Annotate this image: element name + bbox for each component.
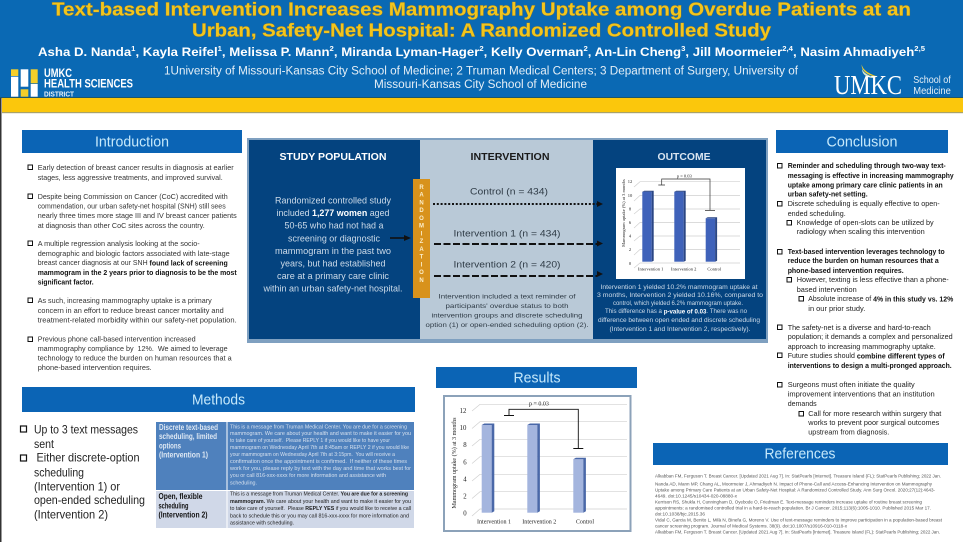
conclusion bullets: Discrete scheduling is equally effective to open- <box>788 199 940 208</box>
affiliations: Missouri-Kansas City School of Medicine <box>374 79 587 91</box>
randomization bar: T <box>420 255 424 261</box>
outcome bar chart: Intervention 2 <box>671 266 696 272</box>
conclusion bullets: in our prior study. <box>808 304 865 313</box>
introduction text: concern in an effort to reduce breast cancer mortality and <box>38 306 224 315</box>
intervention 2 message: mammogram. We care about your health and want to make it easier for you <box>230 499 411 505</box>
results heading: Results <box>514 370 560 386</box>
intervention 1 message: you or call 816-xxx-xxxx for more information and assistance with <box>230 473 386 479</box>
introduction text: mammogram in the 2 years prior to diagnosis to be the most <box>38 268 237 277</box>
conclusion bullets: However, texting is less effective than a phone- <box>797 275 949 284</box>
conclusion bullets: radiology when scaling this intervention <box>797 227 925 236</box>
introduction text: As such, increasing mammography uptake is a primary <box>38 296 212 305</box>
intervention 2 label: Open, flexible <box>158 492 203 501</box>
intervention 1 message: mammogram on Wednesday April 7th at 8:45am or REPLY 2 if you would like <box>230 445 409 451</box>
conclusion bullets: Knowledge of open-slots can be utilized by <box>797 218 934 227</box>
authors: 2,4 <box>782 46 793 52</box>
intervention 1 message: mammogram. We care about your health and want to make it easier for you <box>230 431 411 437</box>
outcome bar chart: Intervention 1 <box>638 266 663 272</box>
introduction text: nearly three times more stage III and IV breast cancer patients <box>38 211 237 220</box>
conclusion bullets: improvement interventions that an institution <box>788 390 935 398</box>
panel: study population <box>249 140 420 339</box>
panel: intervention: Intervention 1 (n = 434) <box>454 228 560 240</box>
methods heading: Methods <box>192 392 245 408</box>
introduction text: treatment-related morbidity within our safety-net population. <box>38 316 237 324</box>
outcome text <box>597 284 763 333</box>
logo: UMKC Health Sciences District: DISTRICT <box>44 90 74 98</box>
results bar chart: 10 <box>460 425 467 432</box>
results bar chart: Intervention 2 <box>522 520 556 526</box>
authors: 3 <box>681 46 686 52</box>
intervention 1 label: options <box>159 442 181 450</box>
conclusion bullets: urban safety-net setting. <box>788 190 868 198</box>
panel: study population: included 1,277 women aged <box>276 208 390 218</box>
methods heading <box>22 387 415 412</box>
references text: doi:10.1038/bjc.2015.36 <box>655 512 705 516</box>
introduction text: Despite being Commission on Cancer (CoC) accredited with <box>38 192 228 201</box>
intervention 1 message: scheduling. <box>230 480 257 486</box>
authors: , Miranda Lyman-Hager <box>334 45 480 59</box>
panel: study population: within an urban safety-net hospital. <box>262 284 402 294</box>
panel: outcome: OUTCOME <box>658 151 710 163</box>
outcome bar chart: 6 <box>629 220 632 225</box>
introduction text: Early detection of breast cancer results in diagnosis at earlier <box>38 163 234 172</box>
references text: appointments: a randomised controlled trial in a hard-to-reach population. Br J Cancer. 2015;113(6):1005-1010. Published 2015 Mar 17. <box>655 506 931 510</box>
panel: intervention: participants' overdue status to both <box>446 303 569 310</box>
outcome text: Intervention 1 yielded 10.2% mammogram uptake at <box>600 284 758 291</box>
authors: , Jill Moormeier <box>685 45 783 59</box>
panel: study population: screening or diagnostic <box>288 233 381 243</box>
outcome bar chart: 4 <box>629 234 632 238</box>
outcome text: This difference has a p-value of 0.03. There was no <box>605 308 747 315</box>
references text: cancer screening program. Journal of Medical Systems. 38(9). doi:10.1007/s10916-010-0118-x <box>655 524 848 528</box>
introduction text: phone-based intervention requires. <box>38 363 152 372</box>
outcome bar chart: Control <box>707 266 722 272</box>
results bar chart: 4 <box>463 476 467 484</box>
results bar chart: 8 <box>463 442 467 449</box>
conclusion heading: Conclusion <box>826 134 898 150</box>
conclusion bullets: interventions to design a multi-pronged approach. <box>788 361 952 370</box>
panel: intervention: intervention groups and discrete scheduling <box>432 312 583 320</box>
references text: Uptake among Primary Care Patients at an Urban Safety-Net Hospital: A Randomized Controlled Study. Ann Surg Oncol. 2020;27(12):4643- <box>655 488 935 492</box>
methods table <box>156 422 414 528</box>
introduction heading <box>22 130 242 153</box>
conclusion bullets: uptake among primary care clinic patients in an <box>788 180 943 190</box>
outcome text: difference between open ended and discrete scheduling <box>598 317 760 324</box>
randomization bar: O <box>419 216 424 222</box>
intervention 1 label: (Intervention 1) <box>159 450 208 460</box>
outcome text: 3 months, Intervention 2 yielded 10.16%, compared to <box>597 292 763 299</box>
references text: 4649. doi:10.1245/s10434-020-08880-x <box>655 494 738 498</box>
randomization bar: Z <box>420 239 424 245</box>
methods bullets: (Intervention 1) or <box>34 480 120 494</box>
results bar chart <box>444 396 630 531</box>
outcome bar chart: Mammogram uptake (%) at 3 months <box>621 179 626 247</box>
conclusion bullets: Future studies should combine different types of <box>788 351 945 360</box>
panel: methods <box>20 387 415 528</box>
authors: , Kayla Reifel <box>135 45 218 59</box>
conclusion bullets: Text-based intervention leverages technology to <box>788 247 945 256</box>
intervention 1 label <box>159 423 218 460</box>
introduction text: significant factor. <box>38 278 94 286</box>
conclusion bullets: Absolute increase of 4% in this study vs. 12% <box>808 294 954 303</box>
methods bullets: scheduling <box>34 465 84 479</box>
introduction heading: Introduction <box>95 134 169 150</box>
methods bullets: sent <box>34 437 55 451</box>
intervention 1 message: your mammogram on Wednesday April 7th at 3:15pm. You will receive a <box>230 452 395 458</box>
outcome bar chart: 10 <box>628 193 633 198</box>
results bar chart: 2 <box>463 494 467 500</box>
conclusion bullets: phone-based intervention requires. <box>788 266 904 275</box>
randomization bar <box>413 179 430 298</box>
randomization bar: A <box>419 247 424 253</box>
affiliations: 1University of Missouri-Kansas City School of Medicine; 2 Truman Medical Centers; 3 Department of Surgery, University of <box>164 66 799 78</box>
arrow: population to randomization <box>390 235 411 241</box>
references text: Kerrison RS, Shukla H, Cunningham D, Oyebode O, Friedman E. Text-message reminders increase uptake of routine breast screening <box>655 500 922 504</box>
randomization bar: D <box>419 208 424 214</box>
results bar chart: Control <box>576 520 594 526</box>
panel: study population: Randomized controlled study <box>275 195 392 205</box>
introduction text <box>28 163 237 372</box>
intervention 2 message: to take care of yourself. Please REPLY YES if you would like to receive a call <box>230 506 411 512</box>
results bar chart: 12 <box>460 408 467 415</box>
references heading <box>653 443 948 465</box>
logo: UMKC Health Sciences District: UMKC <box>44 68 72 80</box>
arrow: intervention 2 <box>434 271 603 277</box>
intervention 1 label: scheduling, limited <box>159 432 217 441</box>
panel: intervention <box>420 140 593 339</box>
references heading: References <box>764 446 836 462</box>
conclusion bullets <box>778 161 954 436</box>
conclusion heading <box>776 130 948 153</box>
affiliations <box>164 66 799 91</box>
results bar chart: 6 <box>463 460 467 466</box>
conclusion bullets: reduce the burden on human resources that a <box>788 256 939 265</box>
authors: , An-Lin Cheng <box>588 45 681 59</box>
intervention 1 label: Discrete text-based <box>159 423 218 432</box>
panel: study population: STUDY POPULATION <box>280 151 386 163</box>
intervention 2 message: This is a message from Truman Medical Center. You are due for a screening <box>230 492 408 498</box>
references text: Nanda AD, Mann MP, Chang AL, Moormeier J, Ahmadiyeh N. Impact of Phone-Call and Access-Enhancing Intervention on Mammography <box>655 482 933 486</box>
conclusion bullets: Surgeons must often initiate the quality <box>788 380 915 389</box>
introduction text: commendation, our urban safety-net hospital (SNH) still sees <box>38 202 226 210</box>
panel: intervention: Intervention 2 (n = 420) <box>454 260 560 270</box>
panel: conclusion <box>776 130 954 436</box>
methods bullets: (Intervention 2) <box>34 507 108 521</box>
methods bullets: open-ended scheduling <box>34 493 145 507</box>
authors: , Melissa P. Mann <box>222 45 330 59</box>
panel: intervention: option (1) or open-ended scheduling option (2). <box>426 322 589 329</box>
panel: study population: mammogram in the past two <box>275 246 391 256</box>
references text: Alkabban FM, Ferguson T. Breast Cancer. [Updated 2021 Aug 7]. In: StatPearls [Internet]. Treasure Island (FL): StatPearls Publishing; 2022 Jan. <box>655 530 940 534</box>
conclusion bullets: population; it demands a complex and personalized <box>788 332 953 341</box>
authors: 2,5 <box>914 46 925 52</box>
authors: , Nasim Ahmadiyeh <box>793 45 914 59</box>
outcome bar chart: 0 <box>629 261 632 266</box>
introduction text: stages, less aggressive treatments, and improved survival. <box>38 173 223 182</box>
intervention 1 message: confirmation once the appointment is confirmed. If neither of these times <box>230 459 407 465</box>
randomization bar: R <box>419 185 424 191</box>
intervention 1 message: to take care of yourself. Please REPLY 1 if you would like to have your <box>230 438 390 444</box>
randomization bar: N <box>419 278 424 284</box>
panel: intervention: INTERVENTION <box>470 151 550 163</box>
panel: intervention: Intervention included a text reminder of <box>438 294 576 300</box>
intervention 2 message <box>230 492 411 526</box>
randomization bar: I <box>421 262 423 268</box>
intervention 1 message: This is a message from Truman Medical Center. You are due for a screening <box>230 424 407 430</box>
intervention 2 label <box>158 492 208 520</box>
results bar chart: p = 0.03 <box>529 401 549 407</box>
intervention 2 message: back to schedule this or you may call 816-xxx-xxxx for more information and <box>230 513 409 519</box>
conclusion bullets: Reminder and scheduling through two-way text- <box>788 161 946 170</box>
arrow: intervention 1 <box>434 240 603 246</box>
intervention 2 message: assistance with scheduling. <box>230 520 294 526</box>
outcome bar chart: 8 <box>629 206 632 212</box>
authors: Asha D. Nanda <box>38 45 123 59</box>
randomization bar: O <box>419 270 424 276</box>
outcome bar chart: 12 <box>628 179 632 184</box>
authors: 2 <box>479 46 484 52</box>
authors: 2 <box>583 46 588 52</box>
conclusion bullets: approach to increasing mammography uptake. <box>788 342 936 351</box>
panel: introduction <box>22 130 242 372</box>
logo: UMKC School of Medicine: Medicine <box>913 85 951 97</box>
logo: UMKC School of Medicine <box>834 64 951 100</box>
header banner <box>0 0 963 113</box>
logo: UMKC Health Sciences District: HEALTH SCIENCES <box>44 78 133 90</box>
title <box>52 0 911 40</box>
intervention 1 message: work for you, please reply by text with the day and time that works best for <box>229 466 411 472</box>
methods bullets <box>20 422 145 521</box>
randomization bar: A <box>419 193 424 199</box>
title: Urban, Safety-Net Hospital: A Randomized Controlled Study <box>192 20 772 40</box>
introduction text: Previous phone call-based intervention increased <box>38 334 196 344</box>
authors: , Kelly Overman <box>484 45 583 59</box>
results bar chart: Mammogram uptake (%) at 3 months <box>451 417 458 508</box>
randomization bar: N <box>419 200 424 206</box>
intervention 2 label: scheduling <box>158 502 189 510</box>
randomization bar: M <box>419 224 424 230</box>
authors: 1 <box>131 46 136 52</box>
conclusion bullets: based intervention <box>797 285 857 294</box>
logo: UMKC School of Medicine: UMKC <box>834 70 902 100</box>
randomization bar: I <box>421 231 423 237</box>
logo: UMKC Health Sciences District <box>11 68 133 98</box>
panel: study population: care at a primary care clinic <box>277 271 390 281</box>
outcome text: control, which yielded 6.2% mammogram uptake. <box>613 300 743 307</box>
panel: outcome <box>593 140 766 339</box>
introduction text: A multiple regression analysis looking at the socio- <box>38 239 200 248</box>
methods bullets: Up to 3 text messages <box>34 422 138 436</box>
panel: study design frame <box>247 138 768 343</box>
panel: references <box>653 443 948 534</box>
conclusion bullets: ended scheduling. <box>788 209 846 218</box>
introduction text: technology to reduce the burden on human resources that a <box>38 354 232 362</box>
intervention 1 message <box>229 424 411 486</box>
panel: results <box>436 367 637 531</box>
introduction text: breast cancer diagnosis at our SNH found lack of screening <box>38 258 228 267</box>
outcome bar chart: 2 <box>629 247 631 252</box>
outcome bar chart <box>616 168 745 279</box>
panel: study population: years, but had established <box>280 258 386 268</box>
panel: intervention: Control (n = 434) <box>470 186 548 198</box>
logo: UMKC School of Medicine: School of <box>913 74 951 86</box>
results bar chart: 0 <box>463 510 467 518</box>
references text <box>655 474 943 534</box>
conclusion bullets: Call for more research within surgery that <box>808 409 942 418</box>
conclusion bullets: The safety-net is a diverse and hard-to-reach <box>788 323 931 332</box>
panel: study population: 50-65 who had not had a <box>284 221 384 231</box>
conclusion bullets: demands <box>788 399 817 408</box>
results heading <box>436 367 637 388</box>
references text: Alkabban FM, Ferguson T. Breast Cancer. [Updated 2021 Aug 7]. In: StatPearls [Internet]. Treasure Island (FL): StatPearls Publishing; 2022 Jan. <box>655 474 941 478</box>
authors: 1 <box>218 46 222 52</box>
conclusion bullets: works to prevent poor surgical outcomes <box>807 418 940 427</box>
introduction text: demographic and biologic factors associated with late-stage <box>38 249 230 258</box>
methods bullets: Either discrete-option <box>36 451 140 465</box>
introduction text: mammography compliance by 12%. We aimed to leverage <box>38 344 228 353</box>
introduction text: at diagnosis than other CoC sites across the country. <box>38 221 205 230</box>
outcome bar chart: p = 0.03 <box>677 174 693 178</box>
outcome text: (Intervention 1 and Intervention 2, respectively). <box>610 326 751 333</box>
authors: 2 <box>330 46 334 52</box>
results bar chart: Intervention 1 <box>477 520 511 526</box>
arrow: control <box>433 201 603 207</box>
references text: Vidal C, Garcia M, Benito L, Milà N, Binefa G, Moreno V. Use of text-message reminders to improve participation in a population-based breast <box>655 518 943 522</box>
intervention 2 label: (Intervention 2) <box>158 510 208 520</box>
conclusion bullets: upstream from diagnosis. <box>808 428 889 436</box>
